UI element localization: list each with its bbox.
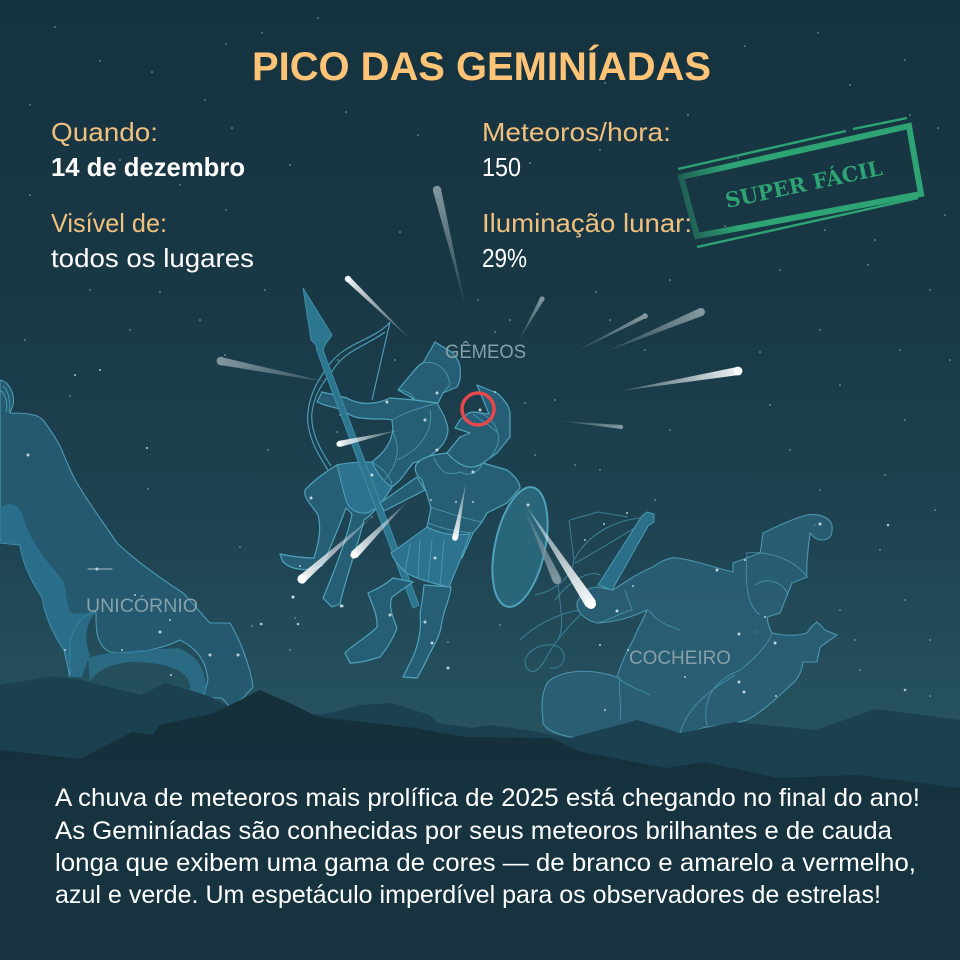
right twin: helmet	[447, 385, 510, 467]
meteor	[217, 357, 332, 383]
left twin: pleated skirt	[337, 462, 392, 513]
scattered background stars	[25, 18, 950, 696]
right twin: helmet details	[473, 412, 498, 458]
rod held in hand	[598, 512, 654, 590]
title: PICO DAS GEMINÍADAS	[252, 44, 711, 89]
left twin: spear	[303, 288, 419, 608]
meteor	[560, 421, 623, 429]
info: visibility: todos os lugares	[51, 243, 254, 273]
description paragraph: azul e verde. Um espetáculo imperdível para os observadores de estrelas!	[55, 881, 881, 909]
info: date: Quando:	[51, 117, 158, 147]
unicorn haunch arches	[88, 648, 206, 695]
left twin: bow	[308, 322, 390, 470]
right twin: shield	[483, 482, 557, 612]
charioteer body	[542, 515, 837, 737]
large meteor	[527, 507, 596, 609]
right twin: front leg	[403, 585, 451, 678]
meteor	[297, 515, 374, 584]
right twin: torso	[415, 437, 520, 558]
constellation label: Cocheiro: COCHEIRO	[629, 648, 731, 669]
dim meteor behind shield	[525, 510, 561, 584]
info: moon illumination	[482, 208, 692, 273]
constellation stars	[28, 370, 820, 710]
unicorn mane detail	[0, 386, 10, 412]
constellation: Gêmeos	[280, 288, 557, 678]
right twin: skirt and belt	[391, 527, 470, 587]
info: visibility	[51, 208, 254, 273]
meteor	[433, 186, 465, 305]
info: moon illumination: 29%	[482, 243, 527, 273]
meteor	[518, 296, 545, 342]
info: meteors per hour: 150	[482, 152, 521, 182]
meteor	[620, 367, 742, 391]
meteor	[350, 501, 408, 559]
right twin: armour details	[428, 458, 483, 533]
right twin: rear leg	[345, 578, 413, 663]
info: visibility: Visível de:	[51, 208, 167, 238]
constellation: Cocheiro	[520, 512, 837, 737]
info: meteors per hour	[482, 117, 671, 182]
meteor	[605, 308, 705, 352]
red circle marking the radiant	[462, 393, 494, 425]
description paragraph: As Geminíadas são conhecidas por seus meteoros brilhantes e de cauda	[55, 817, 892, 845]
description paragraph: longa que exibem uma gama de cores — de branco e amarelo a vermelho,	[55, 849, 916, 877]
right twin: spear arm	[380, 477, 425, 511]
meteor shower	[217, 186, 742, 609]
meteor	[336, 430, 400, 447]
left twin: body and legs	[280, 392, 448, 607]
info: meteors per hour: Meteoros/hora:	[482, 117, 671, 147]
stamp: super fácil: SUPER FÁCIL	[723, 155, 885, 213]
right twin: skirt pleats	[405, 540, 444, 586]
description paragraph	[55, 784, 920, 909]
front mountain ridge	[0, 690, 960, 960]
goat and reins outlines	[520, 512, 645, 671]
constellation: Unicórnio	[0, 380, 253, 707]
info: moon illumination: Iluminação lunar:	[482, 208, 692, 238]
meteor	[452, 483, 466, 541]
left twin: armour details	[372, 403, 437, 487]
unicorn lighter bands	[0, 504, 96, 677]
meteor	[575, 313, 648, 352]
description paragraph: A chuva de meteoros mais prolífica de 2025 está chegando no final do ano!	[55, 784, 920, 812]
constellation label: Unicórnio: UNICÓRNIO	[86, 595, 198, 617]
constellation label: Gêmeos: GÊMEOS	[445, 341, 526, 363]
meteor	[345, 276, 411, 340]
stamp: super fácil	[678, 118, 921, 247]
foreground band	[0, 805, 960, 960]
info: date: 14 de dezembro	[51, 152, 245, 182]
back mountain ridge	[0, 676, 960, 960]
info: date	[51, 117, 245, 182]
left twin: helmet	[398, 342, 460, 403]
left twin: helmet details	[398, 362, 450, 400]
unicorn body	[0, 380, 253, 707]
helmet and arm details	[597, 553, 807, 733]
